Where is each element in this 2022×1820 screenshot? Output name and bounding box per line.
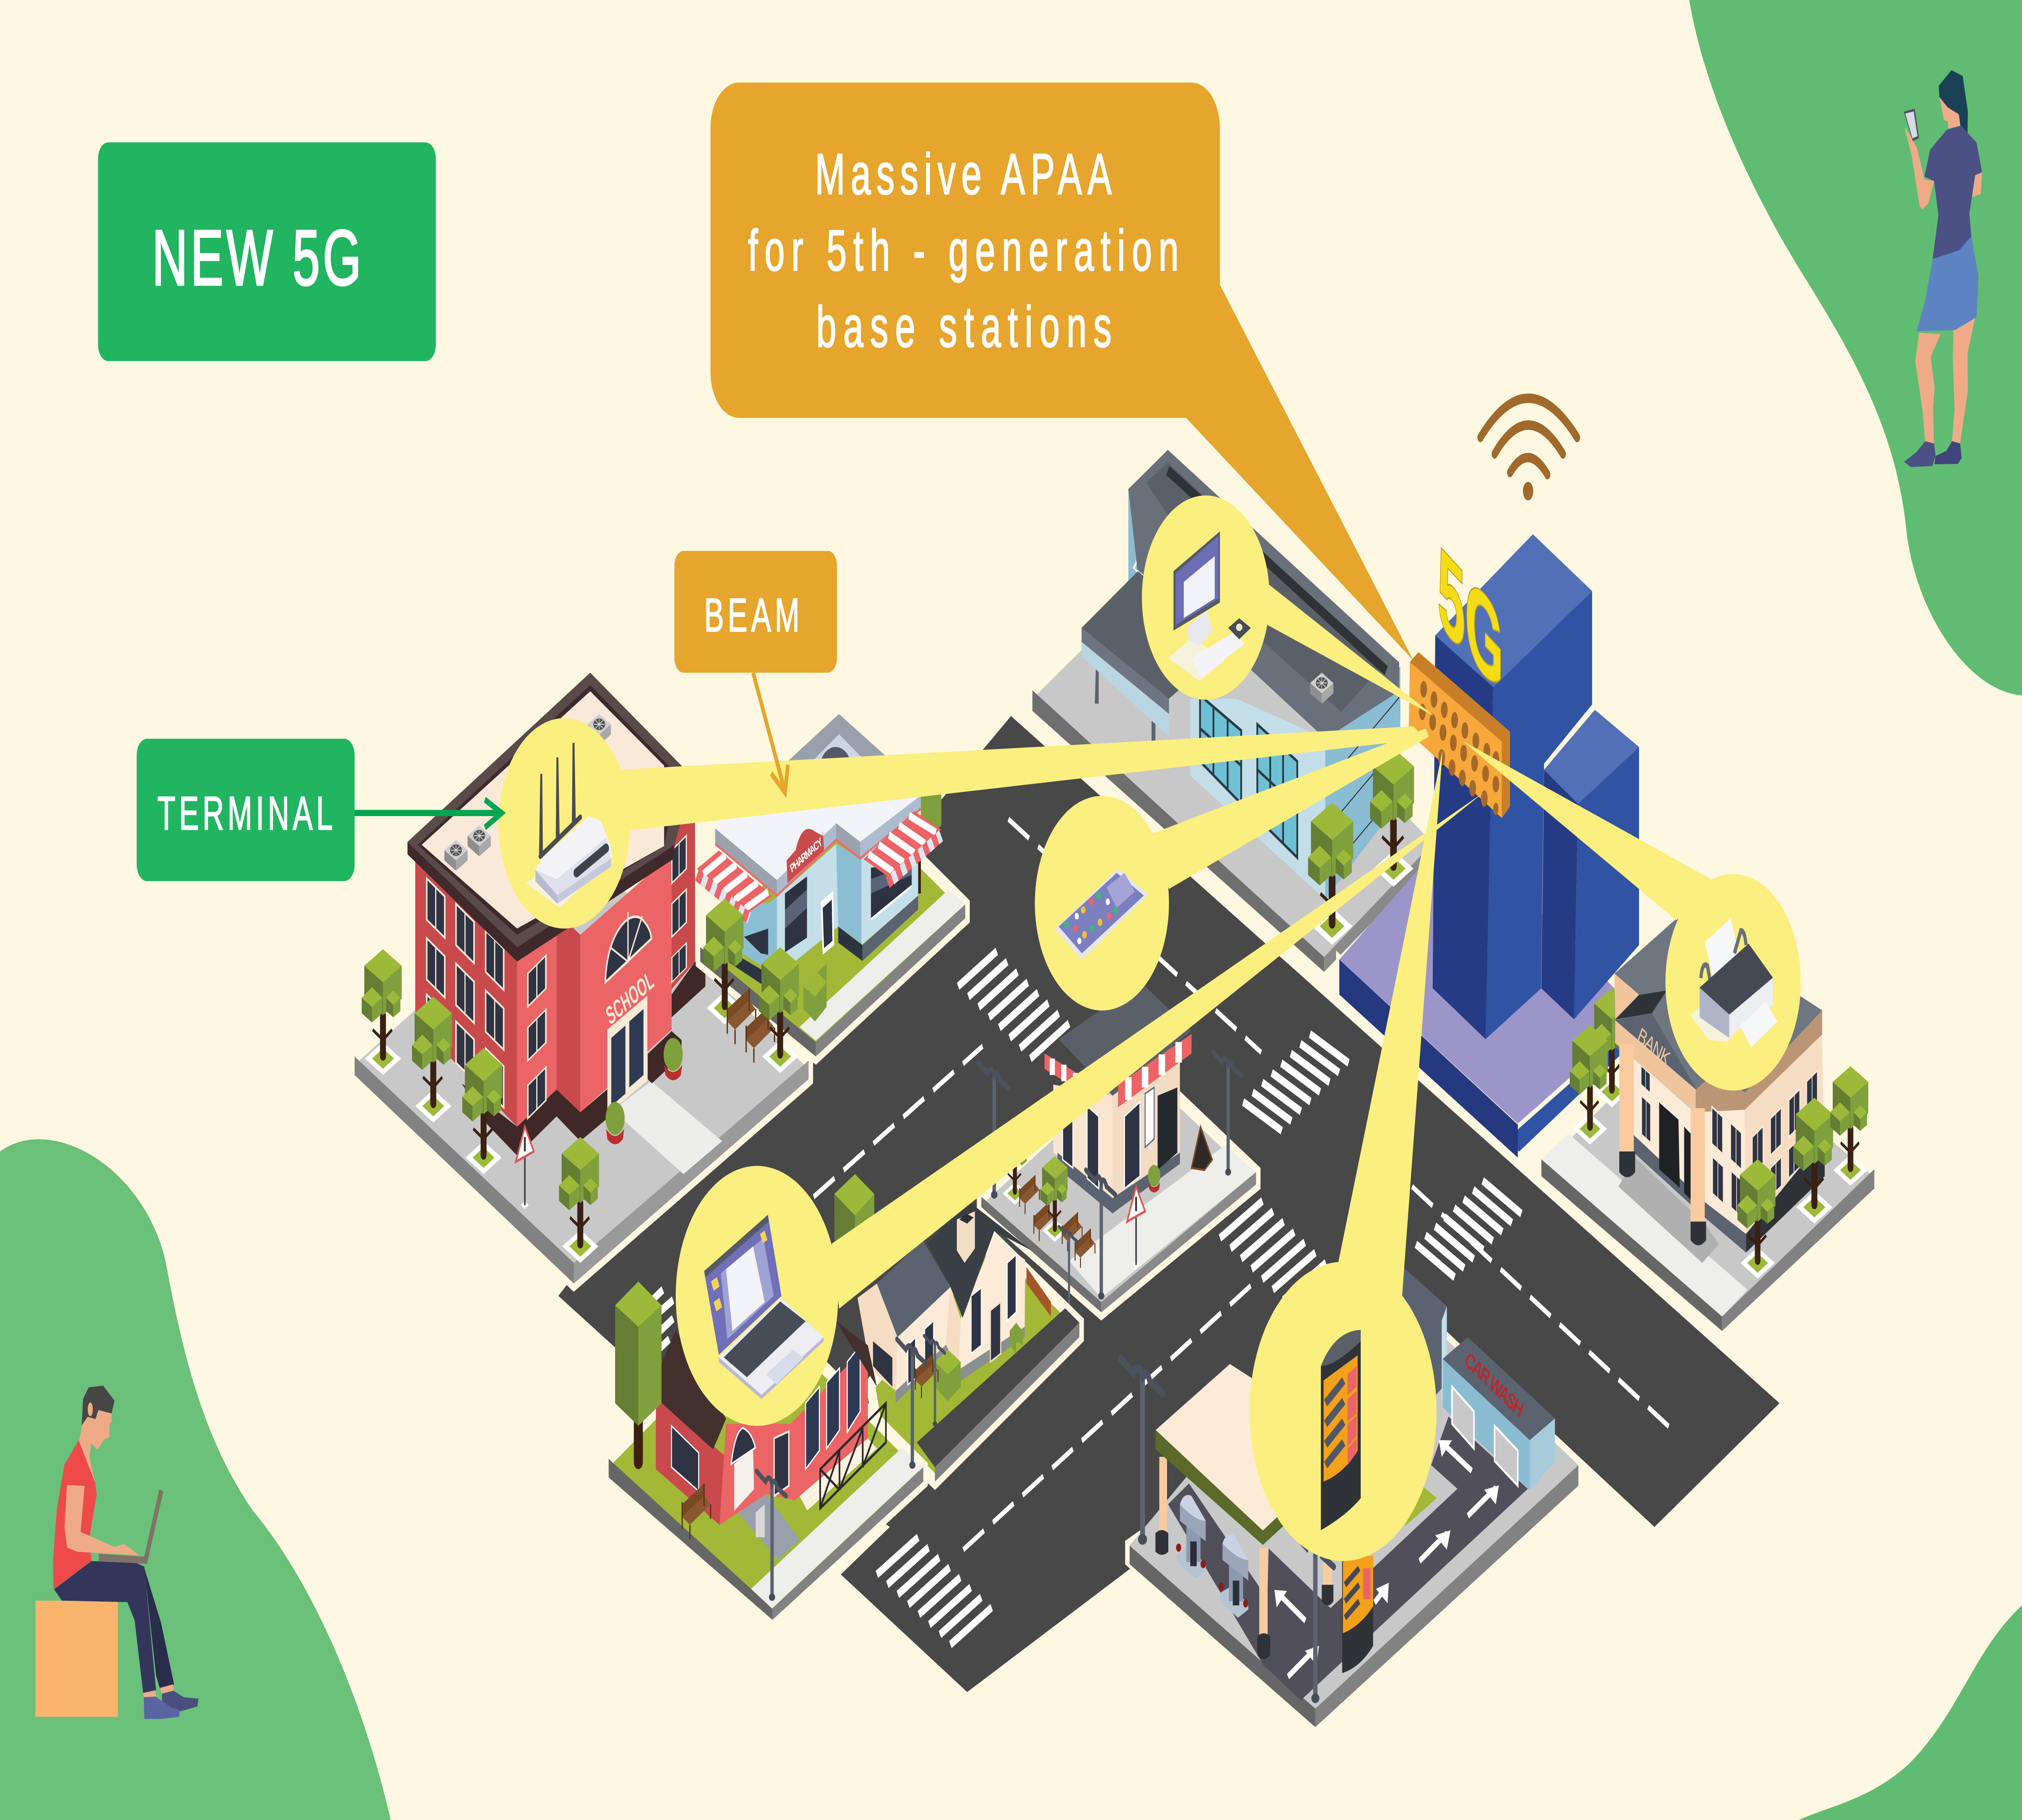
terminal circle: router bbox=[498, 718, 630, 929]
car wash building bbox=[1399, 1267, 1555, 1490]
gas station block bbox=[1120, 1267, 1578, 1727]
tower rear block bbox=[1542, 710, 1639, 1019]
forecourt asphalt bbox=[1168, 1417, 1528, 1700]
red house block bbox=[609, 1174, 945, 1620]
label: NEW 5G bbox=[98, 142, 436, 361]
box seat bbox=[36, 1601, 118, 1717]
icon: totem bbox=[1321, 1330, 1361, 1530]
school name: SCHOOL bbox=[603, 966, 657, 1031]
callout text: base stations bbox=[816, 295, 1112, 359]
5G sign: 5G bbox=[1438, 521, 1503, 718]
yellow beams bbox=[620, 577, 1713, 1309]
person: woman with phone bbox=[1904, 70, 1982, 467]
department store block bbox=[1032, 450, 1434, 972]
handheld phone bbox=[1904, 108, 1919, 141]
icon: router bbox=[526, 743, 613, 908]
mailbox bbox=[756, 1504, 765, 1537]
terminal circle: printer bbox=[1665, 874, 1801, 1090]
label: BEAM: BEAM bbox=[704, 588, 799, 641]
car wash building: CAR WASH bbox=[1462, 1348, 1526, 1422]
road network bbox=[558, 716, 1780, 1692]
green blob bottom left bbox=[0, 1139, 391, 1820]
bakery building bbox=[1045, 982, 1191, 1213]
label: TERMINAL: TERMINAL bbox=[157, 786, 333, 840]
5G tower bbox=[1339, 398, 1640, 1158]
store block trees bbox=[1308, 748, 1414, 945]
school roof bbox=[408, 673, 689, 947]
terminal circle: phone bbox=[1035, 796, 1169, 1010]
forecourt arrows bbox=[1274, 1440, 1499, 1676]
bakery awnings bbox=[1045, 1034, 1191, 1107]
pharmacy block bbox=[697, 714, 965, 1073]
label: NEW 5G: NEW 5G bbox=[152, 214, 361, 302]
icon: phone bbox=[1055, 869, 1148, 959]
school plinth bbox=[462, 962, 705, 1155]
tower main block bbox=[1433, 534, 1592, 1039]
black fence bbox=[820, 1403, 886, 1509]
arrow: terminal to router bbox=[355, 800, 501, 827]
house bbox=[858, 1200, 1032, 1403]
fence bbox=[1026, 1267, 1051, 1316]
terminal circle: desktop bbox=[1142, 495, 1269, 700]
label: BEAM bbox=[675, 551, 837, 673]
pharmacy building bbox=[697, 714, 941, 984]
tower plinth bbox=[1339, 825, 1640, 1158]
school block bbox=[355, 673, 808, 1283]
person: man with laptop on box bbox=[36, 1386, 199, 1719]
antenna array panel bbox=[1409, 652, 1510, 818]
icon: printer bbox=[1690, 918, 1778, 1047]
A-board bbox=[1191, 1127, 1212, 1170]
school building bbox=[408, 673, 705, 1155]
bank block bbox=[1542, 917, 1874, 1331]
bank name: BANK bbox=[1635, 1024, 1673, 1071]
terminal circle: laptop bbox=[676, 1166, 838, 1426]
icon: laptop bbox=[704, 1215, 824, 1399]
bakery block bbox=[978, 982, 1256, 1312]
red house bbox=[649, 1321, 877, 1525]
terminal circle: street totem bbox=[1250, 1262, 1436, 1561]
arrow: beam label to beam bbox=[753, 673, 788, 792]
man figure bbox=[53, 1386, 199, 1719]
green blob bottom right bbox=[1799, 1605, 2022, 1820]
icon: desktop computer bbox=[1168, 531, 1251, 681]
department store block: DEP bbox=[1131, 554, 1158, 593]
bank building bbox=[1614, 917, 1825, 1253]
green blob top right bbox=[1689, 0, 2022, 695]
totem sign at street level bbox=[1342, 1556, 1373, 1673]
tree top behind beam bbox=[834, 1174, 874, 1246]
house block bbox=[858, 1200, 1079, 1481]
callout text: Massive APAA bbox=[815, 142, 1112, 207]
right awning bbox=[864, 811, 941, 882]
wifi icon bbox=[1481, 398, 1577, 500]
callout text: for 5th - generation bbox=[748, 218, 1179, 283]
canopy bbox=[1155, 1364, 1354, 1659]
orange callout bubble bbox=[711, 83, 1413, 660]
left awning bbox=[697, 851, 772, 918]
tall tree bbox=[615, 1281, 662, 1469]
pharmacy sign: PHARMACY bbox=[789, 835, 824, 875]
label: TERMINAL bbox=[137, 739, 355, 881]
callout text bbox=[748, 142, 1179, 359]
